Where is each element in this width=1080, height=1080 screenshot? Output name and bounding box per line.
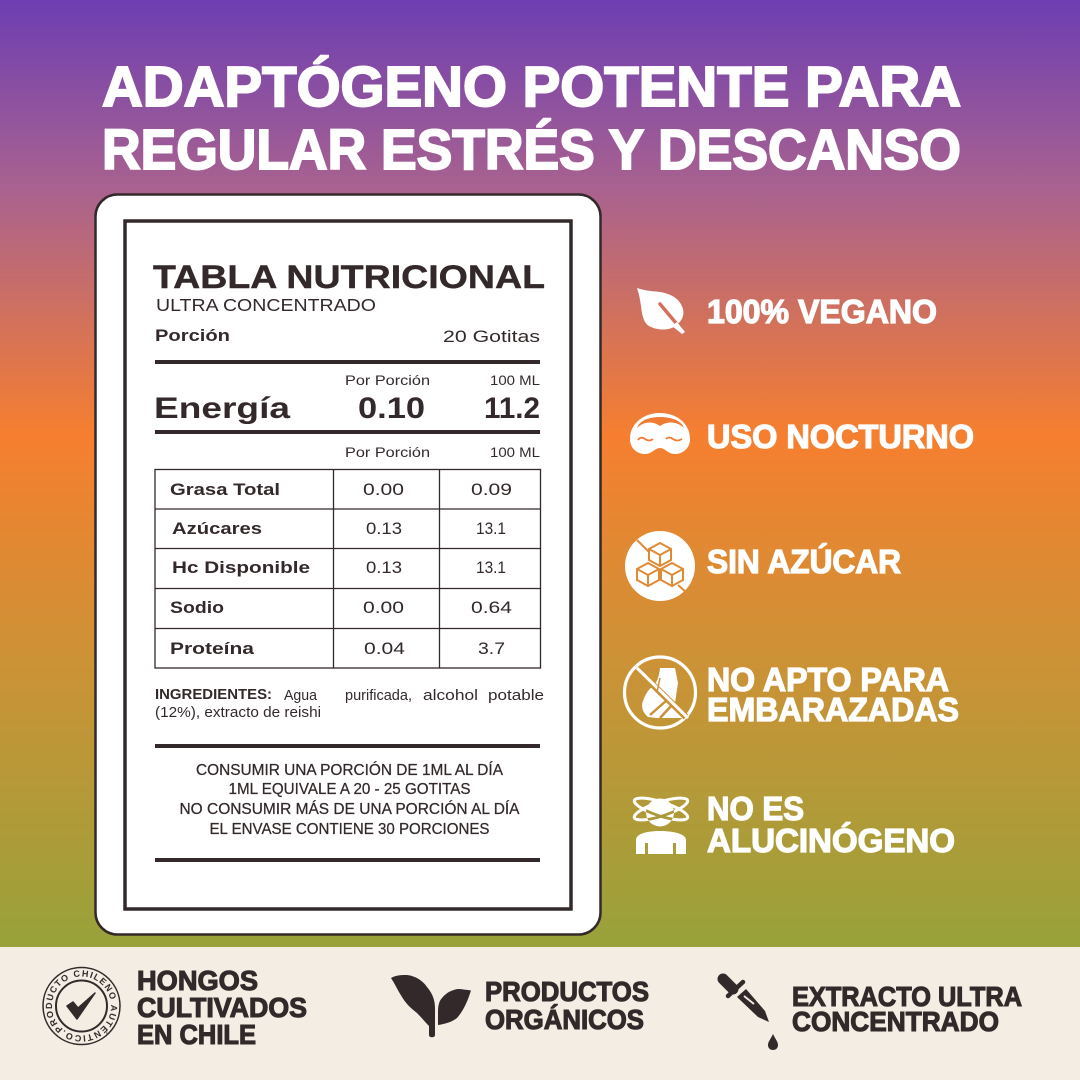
title: [102, 55, 961, 182]
nutrient table: 0.64: [471, 599, 512, 617]
usage instructions: EL ENVASE CONTIENE 30 PORCIONES: [210, 821, 490, 838]
ingredients: potable: [488, 688, 544, 704]
benefit: no apto para embarazadas: EMBARAZADAS: [707, 692, 959, 729]
energy block: Energía: [154, 392, 290, 425]
footer band: [0, 947, 1080, 1080]
ingredients: INGREDIENTES:: [155, 687, 272, 703]
text: hongos cultivados: CULTIVADOS: [137, 992, 307, 1023]
label card: [96, 194, 600, 934]
energy block: 100 ML: [490, 372, 540, 388]
text: hongos cultivados: EN CHILE: [137, 1019, 256, 1050]
icon: dropper: [723, 979, 778, 1050]
icon: sleep mask: [630, 413, 690, 454]
title: ADAPTÓGENO POTENTE PARA: [102, 55, 961, 119]
ingredients: purificada,: [345, 688, 412, 704]
nutrient table: Azúcares: [172, 519, 262, 538]
benefit: 100% vegano: 100% VEGANO: [707, 294, 937, 331]
icon: no pregnancy: [624, 657, 696, 728]
text: extracto ultra concentrado: EXTRACTO ULTRA: [792, 981, 1022, 1012]
nutrient table: 0.04: [364, 640, 405, 658]
text: productos organicos: PRODUCTOS: [485, 976, 649, 1007]
text: extracto ultra concentrado: CONCENTRADO: [792, 1006, 999, 1037]
benefit: no es alucinogeno: NO ES: [707, 791, 804, 828]
energy block: 0.10: [358, 392, 425, 425]
energy block: 11.2: [484, 392, 540, 425]
ingredients: (12%), extracto de reishi: [155, 705, 321, 721]
benefit: no apto para embarazadas: [707, 662, 959, 729]
nutrient table: [155, 470, 540, 668]
nutrient table: 13.1: [476, 559, 506, 577]
nutrient table: 3.7: [478, 640, 505, 658]
nutrient table: 0.00: [363, 481, 404, 499]
text: productos organicos: ORGÁNICOS: [485, 1004, 644, 1035]
nutrient table: 0.00: [363, 599, 404, 617]
text: productos organicos: [485, 976, 649, 1035]
icon: no sugar cubes: [625, 531, 695, 601]
panel: nutrition table: [96, 194, 600, 934]
nutrient table: 0.13: [366, 559, 402, 577]
nutrient table: Hc Disponible: [172, 558, 310, 577]
energy block: [154, 360, 540, 460]
nutrient table: 13.1: [476, 520, 506, 538]
ingredients: [155, 687, 544, 721]
title: REGULAR ESTRÉS Y DESCANSO: [102, 118, 961, 182]
benefit: no apto para embarazadas: NO APTO PARA: [707, 662, 949, 699]
nutrient table: 0.13: [366, 520, 402, 538]
serving row: Porción: [155, 326, 230, 345]
usage instructions: 1ML EQUIVALE A 20 - 25 GOTITAS: [228, 781, 470, 798]
nutrient table: Sodio: [170, 598, 224, 617]
energy block: Por Porción: [345, 444, 430, 460]
usage instructions: NO CONSUMIR MÁS DE UNA PORCIÓN AL DÍA: [180, 801, 520, 818]
benefit: no es alucinogeno: ALUCINÓGENO: [707, 822, 955, 860]
energy block: 100 ML: [490, 444, 540, 460]
table heading: TABLA NUTRICIONAL: [153, 259, 545, 295]
serving row: [155, 326, 540, 346]
ingredients: alcohol: [423, 688, 478, 704]
ingredients: Agua: [284, 688, 318, 704]
icon: sprout: [391, 975, 471, 1037]
inner frame: [125, 221, 571, 909]
benefit: sin azucar: SIN AZÚCAR: [707, 543, 901, 581]
energy block: Por Porción: [345, 372, 430, 388]
icon: leaf: [637, 288, 685, 334]
nutrient table: 0.09: [471, 481, 512, 499]
text: extracto ultra concentrado: [792, 981, 1022, 1037]
icon: person with orbit: [632, 794, 690, 854]
text: hongos cultivados: [137, 965, 307, 1050]
subheading: ULTRA CONCENTRADO: [156, 295, 376, 315]
nutrient table: Grasa Total: [170, 480, 280, 499]
serving row: 20 Gotitas: [443, 327, 540, 346]
text: hongos cultivados: HONGOS: [137, 965, 258, 996]
icon: producto chileno seal: .PRODUCTO CHILENO AUTÉNTICO: [46, 970, 118, 1042]
usage instructions: CONSUMIR UNA PORCIÓN DE 1ML AL DÍA: [196, 762, 504, 779]
benefit: uso nocturno: USO NOCTURNO: [707, 419, 974, 456]
nutrient table: Proteína: [170, 639, 255, 658]
benefit: no es alucinogeno: [707, 791, 955, 860]
usage instructions: [155, 744, 540, 862]
